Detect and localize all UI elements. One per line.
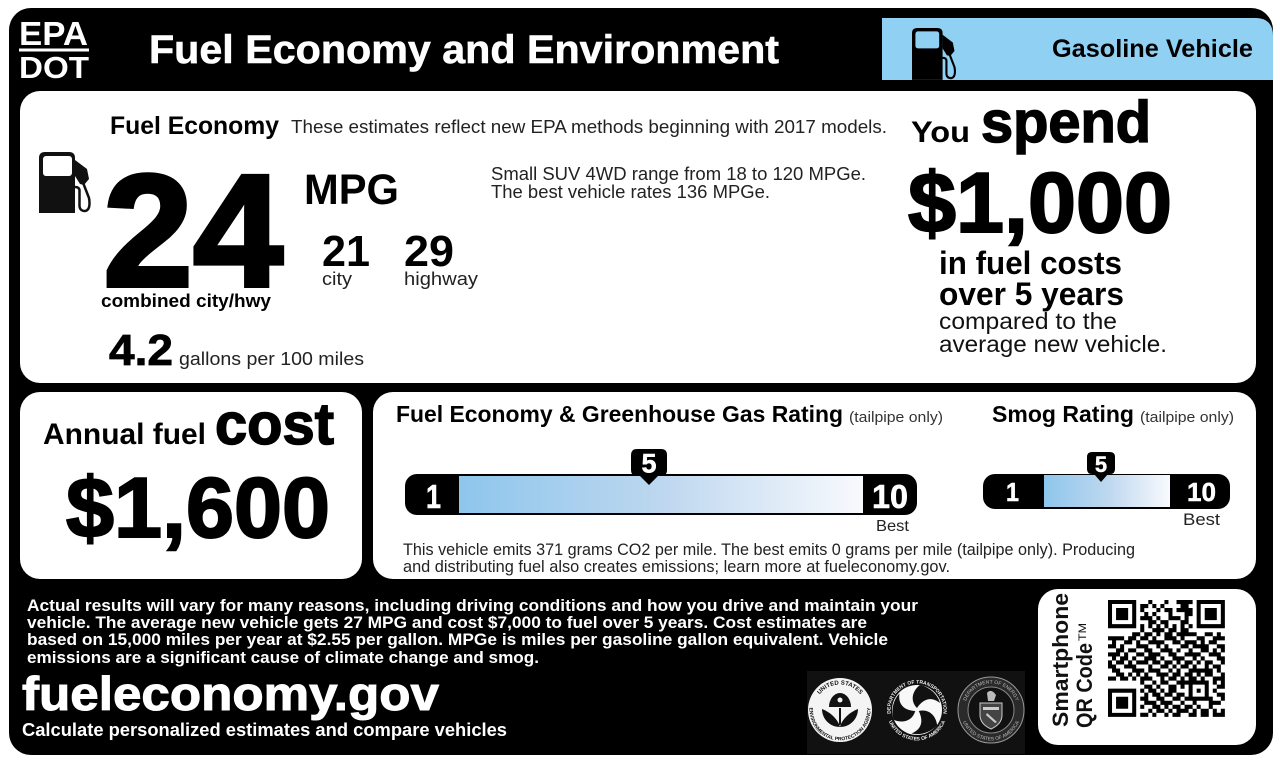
icon: DOE seal: DEPARTMENT OF ENERGY — [963, 680, 1020, 701]
annual cost amount: $1,600 — [66, 461, 330, 556]
agency seals — [807, 671, 1025, 754]
icon: DOT seal: UNITED STATES OF AMERICA — [889, 720, 946, 740]
EPA DOT logo — [19, 15, 89, 85]
vehicle type text: Gasoline Vehicle — [1052, 35, 1253, 63]
panel: annual fuel cost — [20, 392, 362, 579]
best label: Best — [876, 518, 910, 535]
spend description: over 5 years — [939, 276, 1124, 312]
gallons per 100 miles: gallons per 100 miles — [179, 348, 364, 369]
disclaimer text: based on 15,000 miles per year at $2.55 per gallon. MPGe is miles per gasoline gallon equivalent. Vehicle — [27, 631, 888, 649]
icon: DOT seal: DEPARTMENT OF TRANSPORTATION — [887, 680, 947, 714]
website name: fueleconomy.gov — [22, 667, 439, 720]
emissions note — [403, 541, 1135, 576]
rating marker: 5 — [1095, 452, 1107, 477]
annual fuel cost heading: cost — [215, 392, 334, 457]
emissions note: and distributing fuel also creates emissions; learn more at fueleconomy.gov. — [403, 558, 950, 576]
icon: EPA seal — [808, 678, 872, 742]
greenhouse rating bar: 1 — [426, 478, 441, 515]
icon: EPA seal: UNITED STATES — [816, 680, 863, 694]
QR caption: TM — [1077, 623, 1089, 641]
you spend heading: You — [911, 116, 970, 149]
spend description: average new vehicle. — [939, 331, 1167, 357]
fuel economy heading: Fuel Economy — [110, 112, 279, 140]
disclaimer text: emissions are a significant cause of climate change and smog. — [27, 649, 539, 667]
QR caption — [1048, 593, 1097, 728]
EPA DOT logo: DOT — [19, 50, 89, 85]
annual fuel cost heading: Annual fuel — [43, 418, 206, 451]
greenhouse rating bar — [405, 448, 917, 535]
combined MPG value: 24 — [103, 141, 283, 320]
combined label: combined city/hwy — [101, 291, 271, 311]
greenhouse rating heading: Fuel Economy & Greenhouse Gas Rating — [396, 401, 843, 427]
annual fuel cost heading — [43, 392, 334, 457]
smog rating heading — [992, 401, 1234, 427]
greenhouse rating bar: 10 — [872, 478, 908, 515]
QR code — [1108, 600, 1225, 717]
rating marker — [1087, 452, 1115, 482]
smog rating bar — [983, 452, 1230, 529]
spend description — [939, 245, 1167, 357]
QR caption: QR Code — [1072, 643, 1097, 728]
class range text: Small SUV 4WD range from 18 to 120 MPGe. — [491, 164, 866, 184]
panel: ratings — [373, 392, 1256, 579]
MPG unit: MPG — [304, 166, 399, 214]
spend amount: $1,000 — [908, 156, 1172, 251]
icon: fuel pump small — [912, 28, 955, 80]
class range text — [491, 164, 866, 202]
panel: QR code — [1038, 589, 1256, 745]
vehicle type banner — [882, 18, 1273, 80]
website tagline: Calculate personalized estimates and compare vehicles — [22, 720, 507, 740]
class range text: The best vehicle rates 136 MPGe. — [491, 182, 770, 202]
spend description: compared to the — [939, 308, 1117, 334]
highway MPG: 29 — [404, 227, 454, 276]
icon: fuel pump — [39, 152, 90, 213]
city MPG: 21 — [322, 227, 370, 276]
icon: DOT seal — [887, 680, 947, 740]
highway MPG — [404, 227, 478, 289]
highway MPG: highway — [404, 269, 478, 289]
city MPG: city — [322, 269, 352, 289]
smog rating bar: 1 — [1006, 477, 1019, 507]
best label: Best — [1183, 510, 1220, 529]
panel: fuel economy and spend — [20, 90, 1256, 383]
emissions note: This vehicle emits 371 grams CO2 per mile. The best emits 0 grams per mile (tailpipe only). Producing — [403, 541, 1135, 559]
smog rating bar: 10 — [1187, 477, 1216, 507]
icon: DOE seal: UNITED STATES OF AMERICA — [963, 720, 1019, 740]
estimates note: These estimates reflect new EPA methods beginning with 2017 models. — [291, 116, 887, 137]
smog rating heading: Smog Rating — [992, 401, 1134, 427]
gallons per 100 miles — [109, 326, 364, 375]
icon: DOE seal — [958, 676, 1024, 744]
title: Fuel Economy and Environment — [149, 28, 779, 72]
smog rating heading: (tailpipe only) — [1140, 409, 1234, 426]
EPA DOT logo: EPA — [19, 15, 88, 52]
disclaimer text: Actual results will vary for many reasons, including driving conditions and how you drive and maintain your — [27, 597, 919, 615]
gallons per 100 miles: 4.2 — [109, 326, 173, 375]
spend description: in fuel costs — [939, 245, 1122, 281]
greenhouse rating heading: (tailpipe only) — [849, 409, 943, 426]
QR caption: Smartphone — [1048, 593, 1073, 727]
disclaimer text: vehicle. The average new vehicle gets 27 MPG and cost $7,000 to fuel over 5 years. Cost estimates are — [27, 614, 867, 632]
disclaimer text — [27, 597, 919, 667]
rating marker — [631, 448, 667, 485]
icon: EPA seal: ENVIRONMENTAL PROTECTION AGENCY — [809, 708, 870, 740]
rating marker: 5 — [641, 448, 657, 478]
you spend heading: spend — [981, 90, 1151, 155]
